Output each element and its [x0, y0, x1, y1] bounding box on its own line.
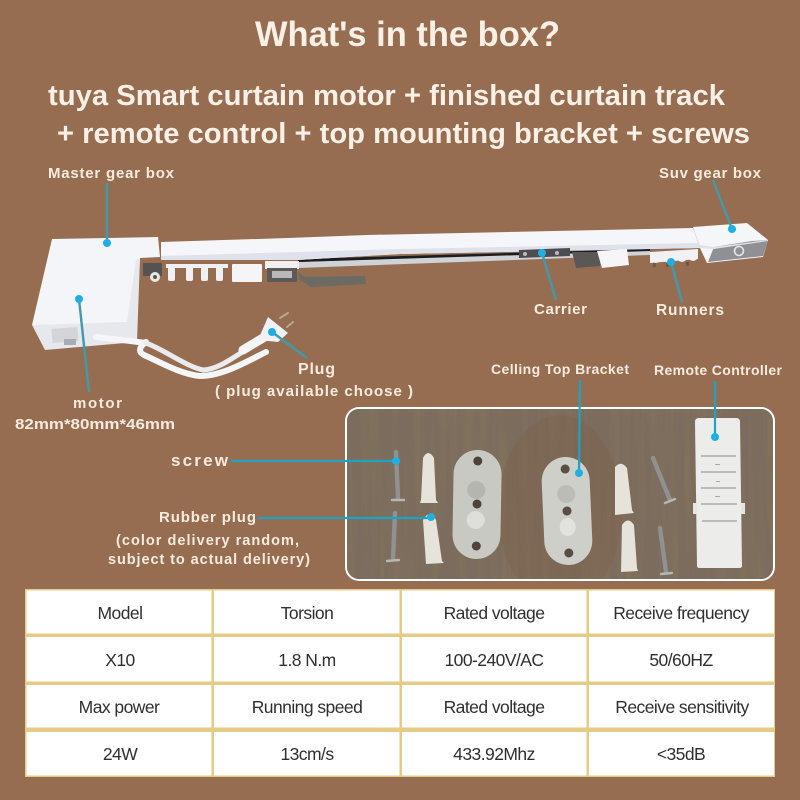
callout: remote controller: Remote Controller — [654, 362, 783, 378]
callout: master gear box — [48, 165, 175, 247]
left runners — [166, 264, 228, 281]
rubber plugs — [420, 453, 638, 572]
table row: values 2: 433.92Mhz — [453, 744, 535, 764]
table row: header 1: Receive frequency — [613, 603, 750, 623]
wood background — [347, 409, 773, 579]
callout: suv gear box — [659, 165, 762, 233]
table row: values 1 — [105, 650, 713, 670]
table row: header 1: Torsion — [281, 603, 333, 623]
table row: header 1 — [98, 603, 750, 623]
callout: master gear box: Master gear box — [48, 165, 175, 182]
carrier plate — [519, 248, 570, 258]
table row: values 2: 13cm/s — [280, 744, 334, 764]
table row: header 2: Running speed — [252, 697, 362, 717]
screws — [387, 452, 675, 574]
callout: carrier: Carrier — [534, 301, 587, 318]
table row: header 2 — [79, 697, 750, 717]
table row: header 2: Max power — [79, 697, 160, 717]
left carrier — [232, 261, 299, 282]
subtitle: tuya Smart curtain motor + finished curtain track — [48, 80, 726, 112]
callout: rubber plug: (color delivery random, — [116, 533, 299, 549]
callout: carrier — [534, 249, 587, 318]
right carrier — [572, 249, 629, 268]
title: What's in the box? — [255, 15, 560, 54]
lower silver rail — [298, 250, 650, 268]
sub gear box — [693, 223, 768, 263]
callout: plug: ( plug available choose ) — [215, 383, 413, 400]
callout: rubber plug — [108, 509, 435, 568]
callout: remote controller — [654, 362, 783, 441]
table row: header 1: Rated voltage — [444, 603, 544, 623]
callout: runners — [656, 258, 724, 319]
callout: suv gear box: Suv gear box — [659, 165, 762, 182]
table row: header 2: Receive sensitivity — [615, 697, 750, 717]
table row: values 1: 50/60HZ — [649, 650, 713, 670]
callout: motor: 82mm*80mm*46mm — [15, 417, 175, 433]
subtitle: + remote control + top mounting bracket + screws — [57, 118, 750, 150]
right bracket plate — [541, 456, 593, 566]
table row: header 1: Model — [98, 603, 142, 623]
callout: plug — [215, 328, 413, 400]
callout: rubber plug: Rubber plug — [159, 509, 256, 526]
photo panel: accessories — [345, 407, 775, 581]
callout: runners: Runners — [656, 302, 724, 319]
callout: ceiling top bracket — [491, 361, 629, 477]
track body — [161, 228, 700, 260]
table row: values 2: 24W — [103, 744, 138, 764]
callout: rubber plug: subject to actual delivery) — [108, 552, 310, 568]
callout: screw: screw — [171, 451, 229, 470]
callout: ceiling top bracket: Celling Top Bracket — [491, 361, 629, 377]
power cable and plug — [96, 313, 293, 376]
table row: values 2: <35dB — [657, 744, 705, 764]
remote controller — [693, 418, 745, 568]
callout: motor — [15, 295, 175, 433]
right runners — [650, 249, 698, 263]
callout: motor: motor — [73, 395, 122, 412]
table row: header 2: Rated voltage — [444, 697, 544, 717]
callout: screw — [171, 451, 400, 470]
motor box — [32, 237, 160, 350]
specification table — [25, 589, 775, 777]
subtitle — [48, 80, 750, 150]
table row: values 1: 1.8 N.m — [278, 650, 336, 670]
curtain track assembly — [32, 223, 768, 376]
bracket bar — [298, 272, 366, 287]
table row: values 1: 100-240V/AC — [444, 650, 544, 670]
table row: values 2 — [103, 744, 705, 764]
left end cap — [143, 263, 162, 282]
table row: values 1: X10 — [105, 650, 136, 670]
left bracket plate — [452, 450, 502, 559]
callout: plug: Plug — [298, 361, 335, 378]
